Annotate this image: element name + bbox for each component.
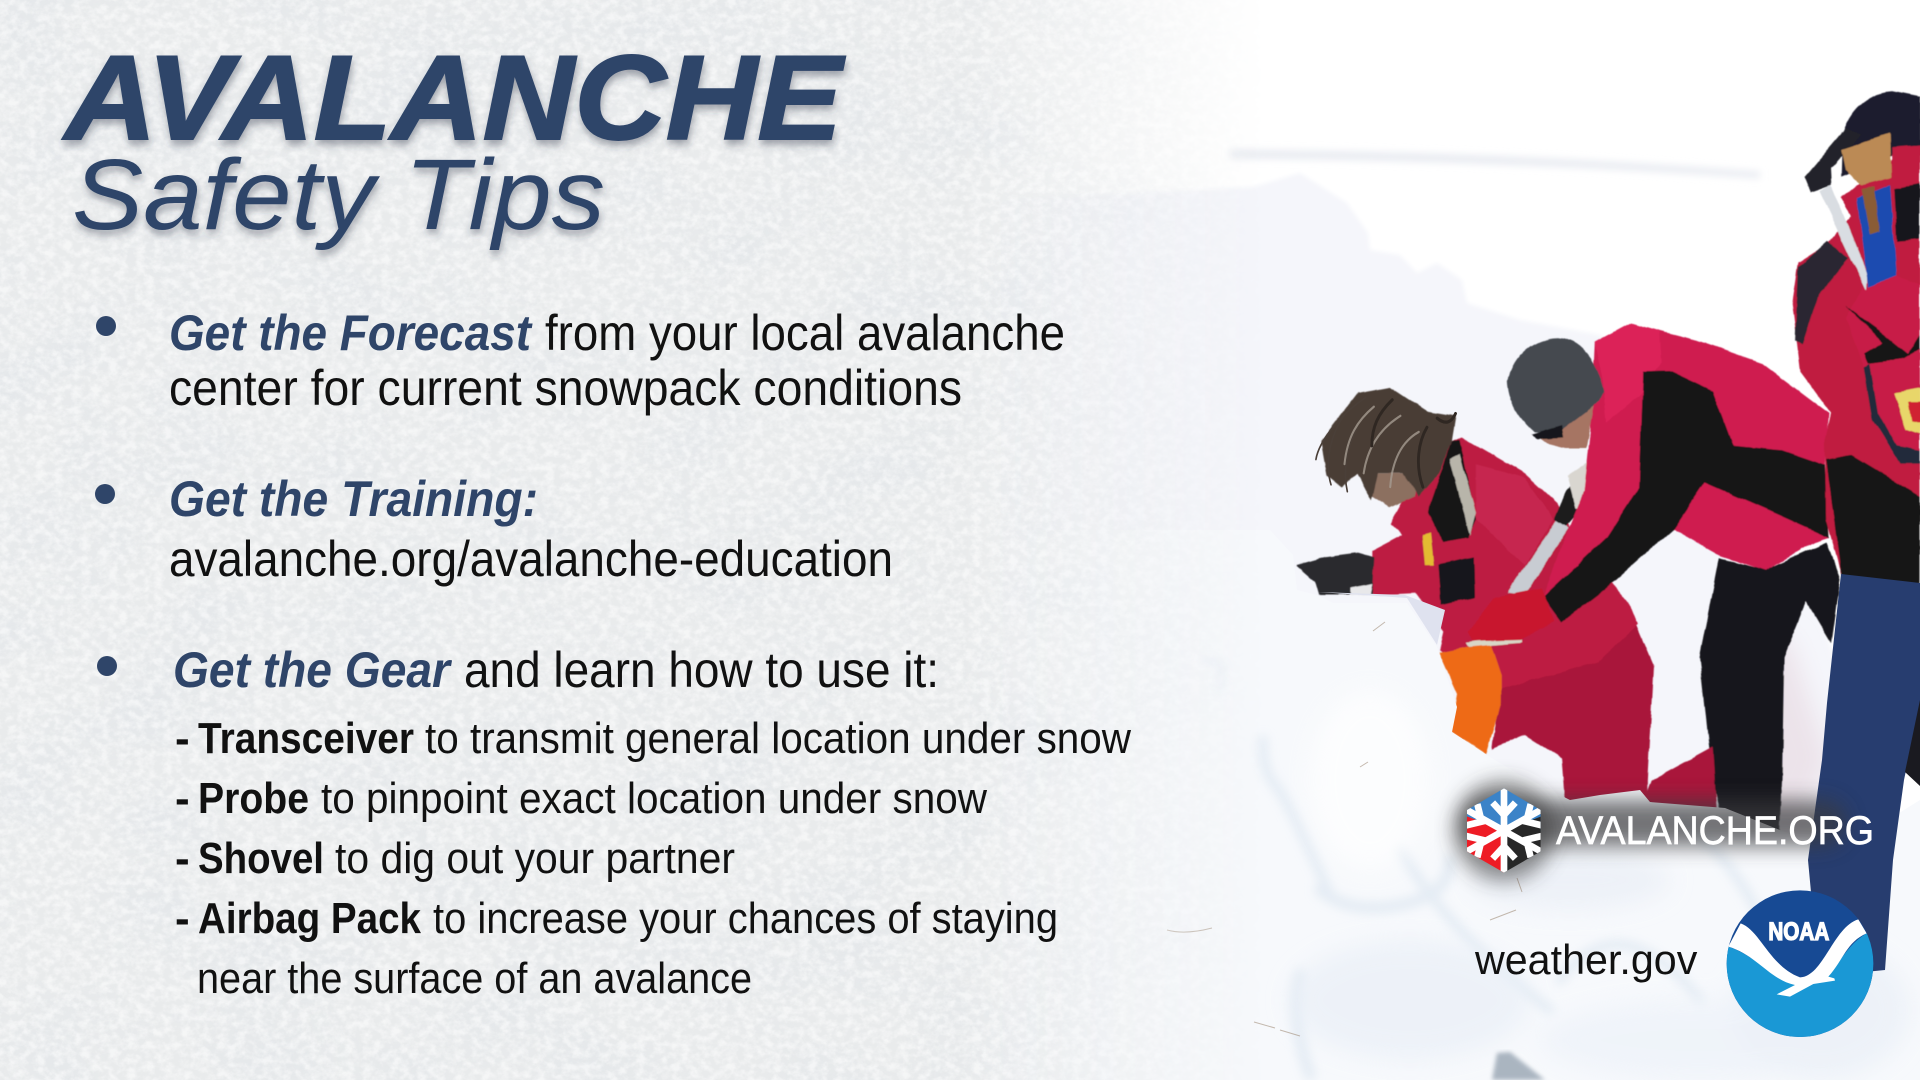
person 3 hat: [1841, 91, 1920, 177]
shovel: to dig out your partner: [335, 834, 735, 883]
snow background texture: [0, 0, 1212, 1080]
forecast text line 2: center for current snowpack conditions: [169, 360, 962, 416]
avalanche.org logo: [1454, 781, 1874, 881]
ice axe: [1820, 185, 1867, 291]
person 1 hair strands: [1316, 397, 1456, 492]
person 1 glove: [1296, 554, 1374, 595]
gear list: [175, 714, 1131, 1003]
person 2 jacket: [1543, 323, 1829, 622]
noaa wordmark: NOAA: [1768, 918, 1829, 946]
probe: Probe: [198, 774, 309, 823]
airbag pack line 2: near the surface of an avalance: [197, 954, 752, 1003]
bullet: [95, 484, 115, 504]
foreground snow mound: [1000, 530, 1920, 1080]
gear lead: Get the Gear: [173, 642, 452, 698]
heading: avalanche: AVALANCHE: [62, 31, 846, 165]
forecast text: from your local avalanche: [545, 305, 1065, 361]
avalanche.org wordmark: AVALANCHE.ORG: [1556, 809, 1874, 853]
transceiver: Transceiver: [198, 714, 414, 763]
noaa logo: [1726, 890, 1874, 1037]
person 1 face: [1362, 473, 1419, 508]
probe: to pinpoint exact location under snow: [321, 774, 987, 823]
person 1 hair: [1321, 387, 1456, 501]
transceiver: to transmit general location under snow: [425, 714, 1131, 763]
probe: -: [175, 774, 190, 823]
distant snow streak: [1230, 150, 1760, 178]
person 2 hat: [1507, 338, 1603, 433]
title: [62, 31, 846, 251]
airbag pack: Airbag Pack: [198, 894, 421, 943]
person 1 red trousers: [1492, 622, 1653, 813]
person 3 backpack: [1845, 276, 1920, 464]
airbag pack: to increase your chances of staying: [433, 894, 1058, 943]
shovel: Shovel: [198, 834, 324, 883]
tip: training: [95, 471, 893, 587]
person 2 gloves: [1468, 588, 1554, 641]
shovel: -: [175, 834, 190, 883]
icon: snowflake hexagon: [1467, 788, 1541, 872]
logos: [1454, 781, 1880, 1043]
weather.gov: weather.gov: [1474, 937, 1698, 983]
forecast lead: Get the Forecast: [169, 305, 533, 361]
bullet: [97, 656, 117, 676]
person 1 jacket: [1372, 437, 1638, 689]
snow hollow under the glove: [1318, 592, 1445, 645]
shovel shaft: [1508, 519, 1569, 595]
twigs: [1167, 622, 1522, 1036]
snow shading: [1290, 690, 1910, 1080]
tip: gear: [97, 642, 1131, 1003]
person 3 jacket: [1792, 143, 1920, 587]
people: [1296, 91, 1920, 836]
gear text: and learn how to use it:: [464, 642, 939, 698]
person 2 face: [1535, 404, 1594, 448]
snow pile behind the rescuers: [1000, 173, 1920, 1080]
tip: forecast: [96, 305, 1065, 416]
shovel blade: [1439, 642, 1501, 754]
photo: rescuers digging in snow: [1000, 0, 1920, 1080]
person 3 dark strip: [1905, 700, 1920, 786]
airbag pack: -: [175, 894, 190, 943]
person 2 black trousers: [1700, 542, 1840, 836]
training url: avalanche.org/avalanche-education: [169, 531, 893, 587]
crevice: [1492, 1052, 1545, 1080]
bullet: [96, 316, 116, 336]
transceiver: -: [175, 714, 190, 763]
heading: safety tips: Safety Tips: [72, 139, 605, 251]
person 3 blue trousers: [1808, 574, 1920, 973]
training lead: Get the Training:: [169, 471, 538, 527]
snow creases: [1205, 660, 1780, 1075]
